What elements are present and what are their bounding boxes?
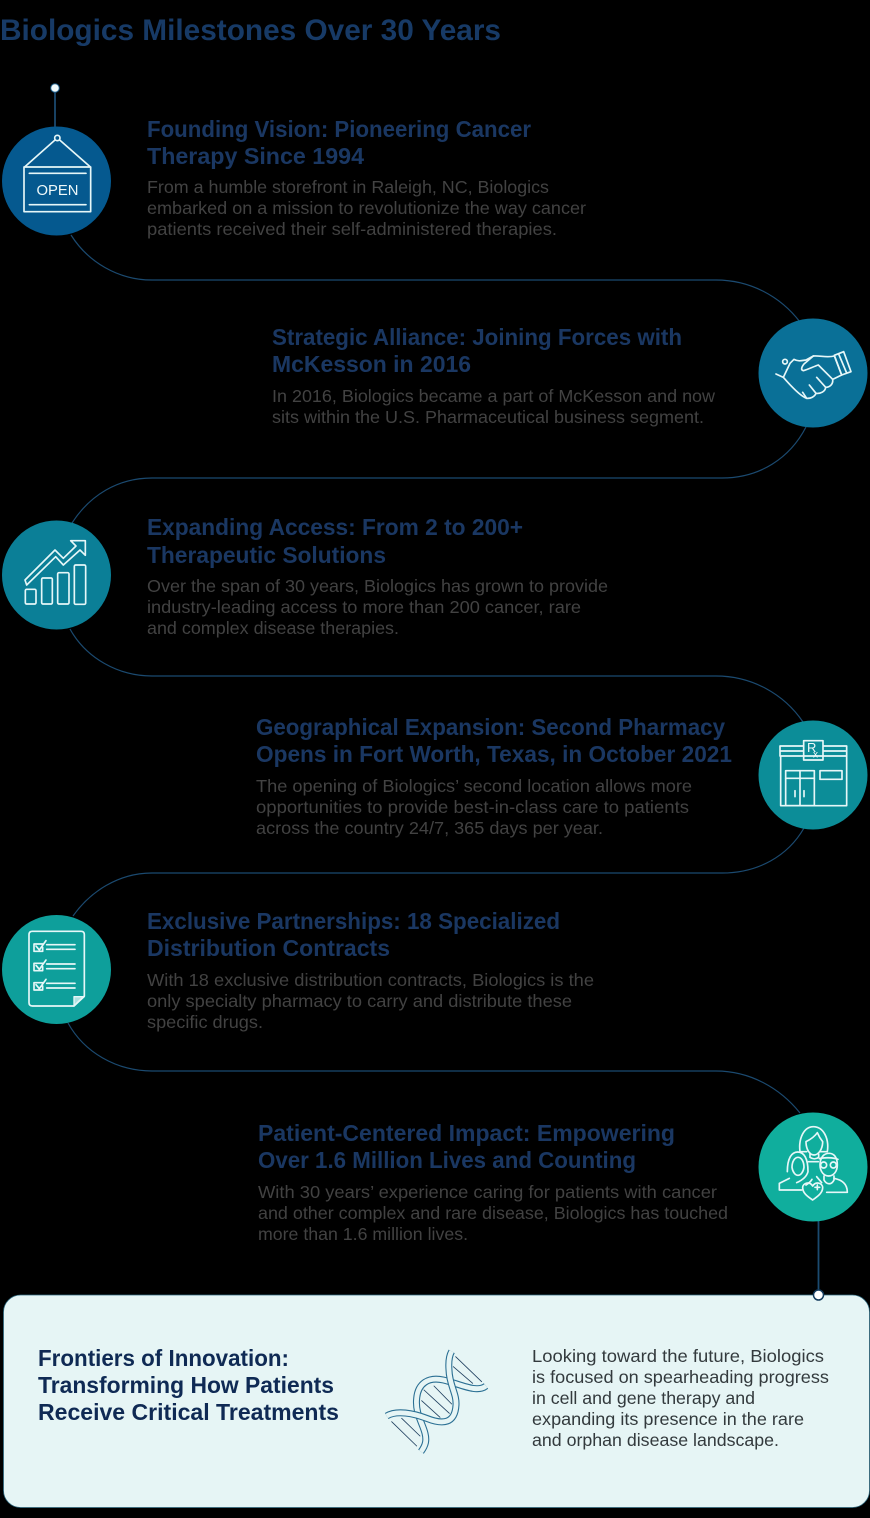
icon: DNA helix [387, 1351, 486, 1452]
panel body text [532, 1346, 829, 1450]
icon: handshake [758, 318, 868, 428]
milestone 6: patient-centered impact [258, 1112, 868, 1244]
milestone 6 text: Patient-Centered Impact: Empowering [258, 1120, 675, 1146]
milestone 2 text: McKesson in 2016 [272, 351, 471, 377]
panel heading: Frontiers of Innovation: [38, 1345, 289, 1371]
milestone 3 text: and complex disease therapies. [147, 618, 399, 638]
milestone 4: geographical expansion [256, 714, 868, 838]
milestone 1: founding vision [2, 116, 586, 239]
milestone 4 text: The opening of Biologics’ second location allows more [256, 776, 692, 796]
icon: pharmacy storefront: R [807, 740, 816, 755]
milestone 5 text [147, 908, 594, 1032]
panel heading: Transforming How Patients [38, 1372, 334, 1398]
milestone 5 text: With 18 exclusive distribution contracts, Biologics is the [147, 970, 594, 990]
title: Biologics Milestones Over 30 Years [0, 14, 501, 47]
milestone 6 text: Over 1.6 Million Lives and Counting [258, 1147, 636, 1173]
milestone 4 text: Opens in Fort Worth, Texas, in October 2021 [256, 741, 732, 767]
milestone 2: strategic alliance [272, 318, 868, 428]
icon: pharmacy storefront [758, 720, 868, 830]
milestone 4 text: Geographical Expansion: Second Pharmacy [256, 714, 725, 740]
icon: open sign [2, 126, 111, 236]
milestone 6 text: With 30 years’ experience caring for patients with cancer [258, 1182, 717, 1202]
panel: frontiers of innovation [4, 1295, 870, 1508]
milestone 2 text: In 2016, Biologics became a part of McKesson and now [272, 386, 715, 406]
milestone 5 text: only specialty pharmacy to carry and distribute these [147, 991, 572, 1011]
icon: patient family with heart [758, 1112, 868, 1222]
milestone 3 text: Over the span of 30 years, Biologics has grown to provide [147, 576, 608, 596]
panel body text: and orphan disease landscape. [532, 1430, 779, 1450]
milestone 5 text: specific drugs. [147, 1012, 263, 1032]
milestone 2 text [272, 324, 715, 427]
milestone 2 text: Strategic Alliance: Joining Forces with [272, 324, 682, 350]
milestone 1 text: embarked on a mission to revolutionize the way cancer [147, 198, 586, 218]
milestone 1 text [147, 116, 586, 239]
icon: open sign: OPEN [36, 182, 78, 199]
icon: growth chart [2, 520, 111, 630]
milestone 1 text: From a humble storefront in Raleigh, NC, Biologics [147, 177, 549, 197]
timeline connector path [55, 88, 818, 1295]
milestone 4 text: opportunities to provide best-in-class care to patients [256, 797, 689, 817]
milestone 3 text [147, 514, 608, 638]
milestone 6 text [258, 1120, 728, 1244]
timeline start dot [51, 84, 59, 92]
milestone 1 text: Founding Vision: Pioneering Cancer [147, 116, 531, 142]
milestone 6 text: and other complex and rare disease, Biologics has touched [258, 1203, 728, 1223]
milestone 3 text: Therapeutic Solutions [147, 542, 386, 568]
panel body text: expanding its presence in the rare [532, 1409, 804, 1429]
milestone 3 text: industry-leading access to more than 200 cancer, rare [147, 597, 581, 617]
icon: checklist document [2, 915, 111, 1024]
milestone 6 text: more than 1.6 million lives. [258, 1224, 468, 1244]
icon: pharmacy storefront: x [813, 750, 818, 760]
milestone 1 text: Therapy Since 1994 [147, 143, 364, 169]
panel body text: Looking toward the future, Biologics [532, 1346, 824, 1366]
panel heading: Receive Critical Treatments [38, 1399, 339, 1425]
timeline end dot [814, 1290, 824, 1300]
panel body text: in cell and gene therapy and [532, 1388, 755, 1408]
milestone 3: expanding access [2, 514, 608, 638]
milestone 5 text: Distribution Contracts [147, 935, 390, 961]
panel body text: is focused on spearheading progress [532, 1367, 829, 1387]
milestone 3 text: Expanding Access: From 2 to 200+ [147, 514, 523, 540]
panel heading [38, 1345, 339, 1425]
milestone 1 text: patients received their self-administered therapies. [147, 219, 557, 239]
milestone 4 text [256, 714, 732, 838]
milestone 5: exclusive partnerships [2, 908, 594, 1032]
milestone 5 text: Exclusive Partnerships: 18 Specialized [147, 908, 560, 934]
milestone 4 text: across the country 24/7, 365 days per year. [256, 818, 603, 838]
milestone 2 text: sits within the U.S. Pharmaceutical business segment. [272, 407, 704, 427]
